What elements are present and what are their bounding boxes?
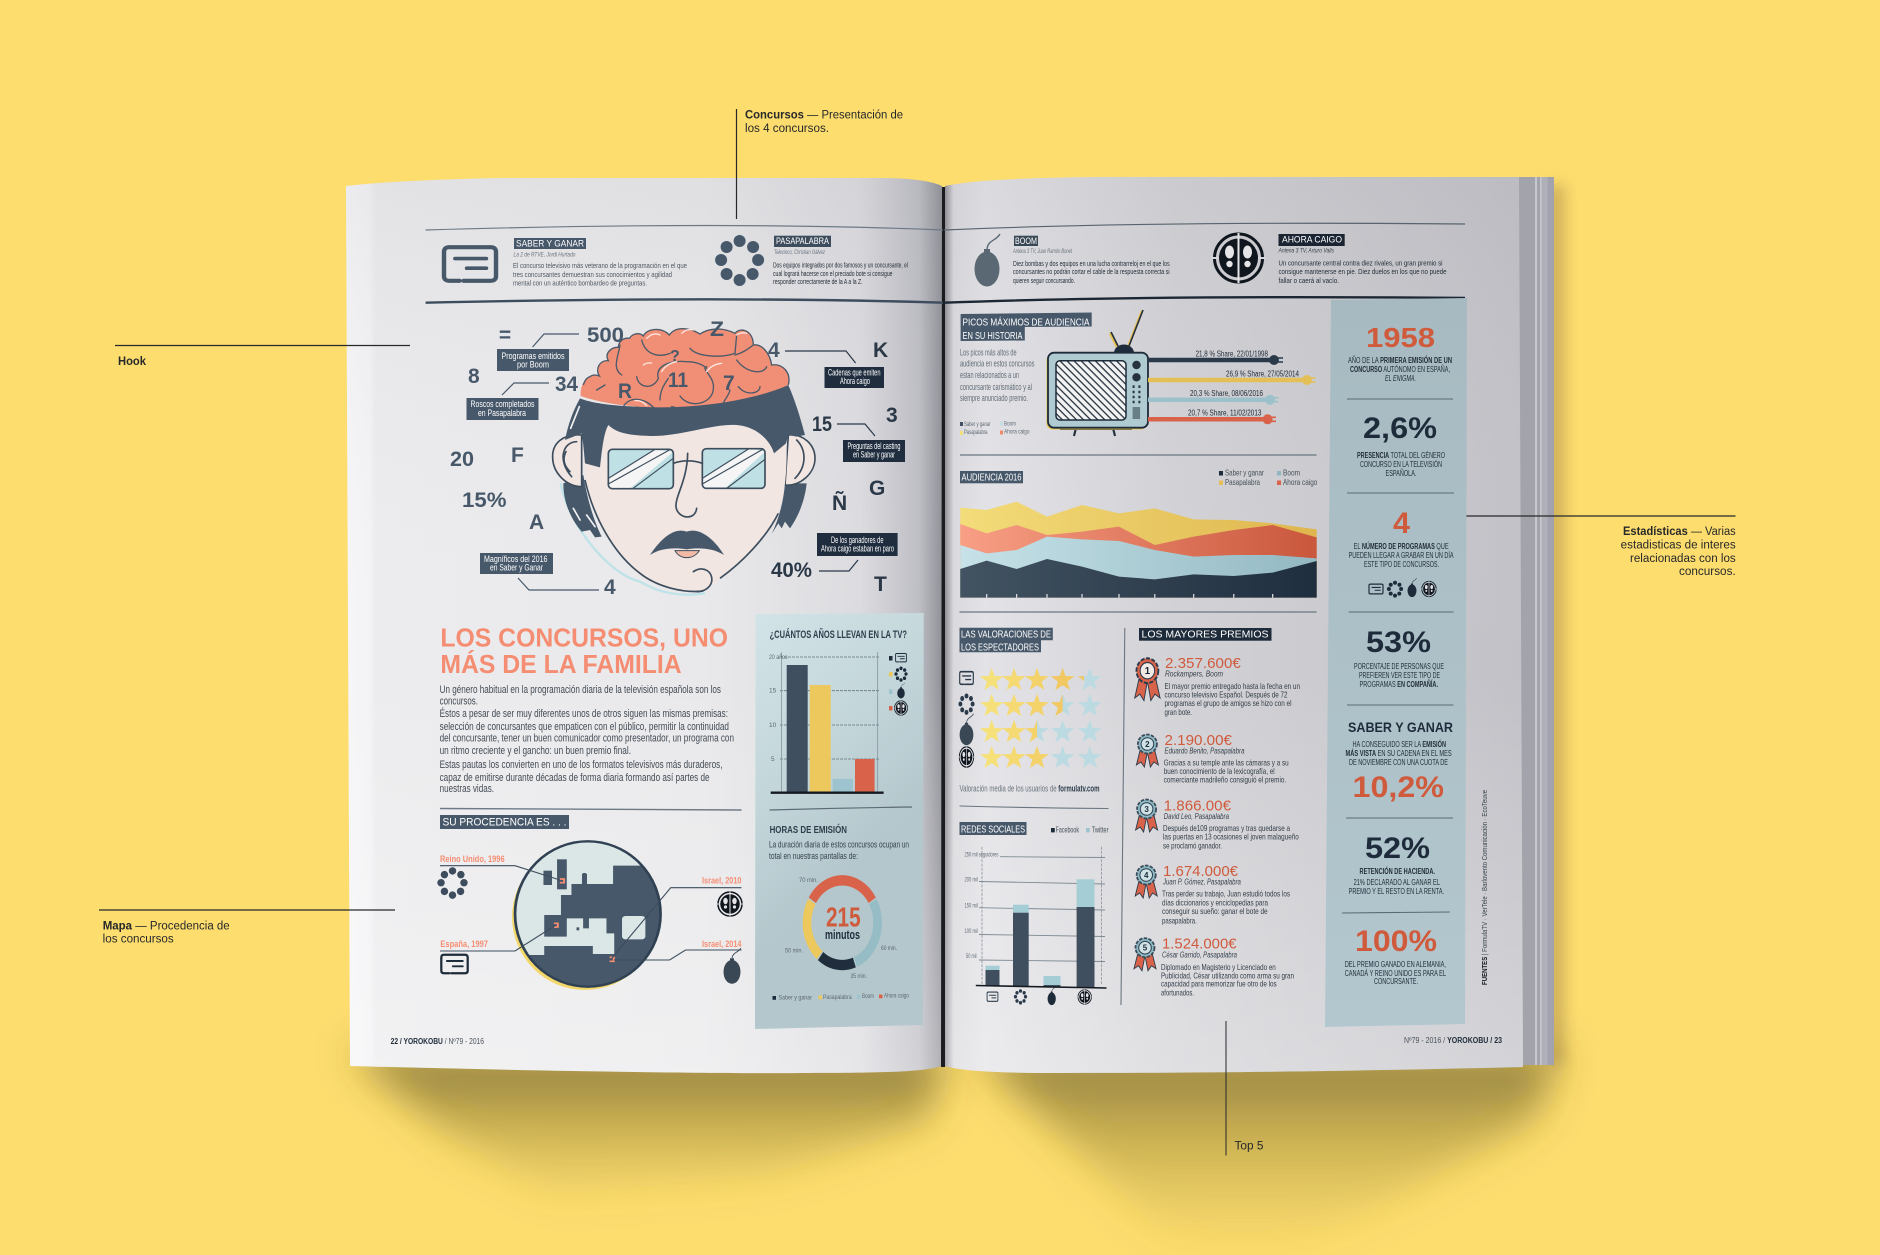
- stat: 1958: [1348, 322, 1452, 383]
- cable: Pasapalabra peak: [1148, 370, 1316, 385]
- label: Pasapalabra: [774, 236, 831, 247]
- heading: mayores premios: LOS MAYORES PREMIOS: [1142, 629, 1268, 641]
- stat: 53%: PORCENTAJE DE PERSONAS QUE: [1354, 662, 1444, 671]
- text block: introduction: selección de concursantes que empaticen con el público, permitir la continuidad: [440, 721, 729, 733]
- prize 2: buen conocimiento de la lexicografía, el: [1164, 766, 1275, 776]
- prize 5: afortunados.: [1161, 988, 1194, 998]
- legend: audiencia: Pasapalabra: [1225, 478, 1260, 487]
- panel: Ahora caigo intro: fallar o caerá al vacío.: [1278, 276, 1339, 285]
- callout: Magnificos: [480, 553, 553, 574]
- panel: hook numbers and letters: ?: [670, 348, 680, 365]
- sources: FUENTES | FormulaTV · VerTele · Barlovento Comunicación · EcoTeuve: [1480, 790, 1489, 985]
- panel: hook numbers and letters: Z: [710, 318, 724, 341]
- illustration: television: [1046, 310, 1148, 436]
- stat: 53%: PROGRAMAS EN COMPAÑÍA.: [1360, 680, 1438, 689]
- map origin: Espana: [440, 925, 556, 973]
- bar chart: followers: 100 mil: [964, 928, 978, 935]
- panel: hook numbers and letters: 7: [723, 372, 735, 395]
- rating: Pasapalabra: [958, 694, 1102, 716]
- spine: [941, 187, 945, 1067]
- panel: Ahora caigo intro: AHORA CAIGO: [1282, 235, 1342, 245]
- bar chart: followers: 200 mil: [964, 877, 978, 884]
- text block: introduction: del concursante, tener un buen comunicador como presentador, un programa con: [440, 733, 734, 745]
- legend: audiencia: Ahora caigo: [1283, 478, 1318, 487]
- cable: Boom peak: [1148, 389, 1278, 405]
- panel: Pasapalabra intro: Dos equipos integrados por dos famosos y un concursante, el: [773, 261, 908, 270]
- stat: Saber y ganar 10,2%: HA CONSEGUIDO SER LA EMISIÓN: [1352, 740, 1446, 749]
- callout: Roscos completados: en Pasapalabra: [478, 408, 526, 418]
- map origin: Israel 2014: Israel, 2014: [702, 939, 742, 950]
- panel: hook numbers and letters: A: [529, 511, 544, 534]
- stat: 100%: DEL PREMIO GANADO EN ALEMANIA,: [1345, 960, 1446, 969]
- stat: 52%: 52%: [1365, 832, 1430, 865]
- heading: picos maximos: PICOS MÁXIMOS DE AUDIENCIA: [962, 316, 1090, 329]
- cable: Boom peak: 20,3 % Share, 08/06/2016: [1190, 389, 1263, 398]
- prize 4: [1135, 863, 1290, 925]
- map origin: Reino Unido: Reino Unido, 1996: [440, 854, 505, 865]
- panel: picos maximos: [960, 310, 1316, 436]
- rating: Saber y ganar: [960, 668, 1102, 690]
- callout: Roscos completados: [466, 398, 538, 420]
- map origin: Israel 2010: [612, 876, 744, 958]
- annotation: Estadisticas: concursos.: [1679, 566, 1736, 578]
- rating: Boom: [960, 714, 1102, 745]
- footer: left folio: 22 / YOROKOBU / Nº79 - 2016: [391, 1037, 484, 1046]
- panel: hook numbers and letters: 40%: [771, 559, 812, 582]
- bar chart: years on air: 20 años: [769, 654, 788, 661]
- donut chart: 215 minutos: 50 min.: [785, 948, 803, 955]
- prize 5: [1134, 935, 1294, 998]
- panel: Boom intro: quieren seguir concursando.: [1013, 276, 1075, 285]
- prize 5: 5: [1143, 944, 1148, 953]
- stat: 4: [1349, 507, 1454, 598]
- panel: los mayores premios: [1134, 628, 1300, 998]
- panel: hook numbers and letters: 500: [587, 324, 624, 347]
- prize 2: comerciante madrileño consiguió el premio.: [1164, 775, 1286, 785]
- callout: Programas emitidos: Programas emitidos: [502, 351, 565, 361]
- prize 4: Juan P. Gómez, Pasapalabra: [1162, 877, 1241, 886]
- heading: redes sociales: REDES SOCIALES: [961, 824, 1025, 836]
- text block: duracion: [769, 840, 909, 862]
- illustration: head with brain: [553, 329, 815, 595]
- stat: Saber y ganar 10,2%: SABER Y GANAR: [1348, 719, 1453, 735]
- stat: 52%: PREMIO Y EL RESTO EN LA RENTA.: [1349, 887, 1444, 896]
- panel: Ahora caigo intro: consigue mantenerse en pie. Diez duelos en los que no puede: [1278, 267, 1446, 276]
- panel: redes sociales: [960, 822, 1109, 1005]
- prize 4: 1.674.000€: [1163, 863, 1239, 880]
- panel: Pasapalabra intro: cual logrará hacerse con el preciado bote si consigue: [773, 269, 892, 278]
- text block: introduction: Éstos a pesar de ser muy diferentes unos de otros siguen las mismas premisas:: [440, 707, 728, 720]
- panel: hook numbers and letters: K: [873, 339, 888, 362]
- legend: audiencia: [1219, 469, 1318, 487]
- callout: Preguntas del casting: en Saber y ganar: [853, 450, 895, 460]
- prize 1: Rockampers, Boom: [1165, 670, 1223, 679]
- text block: picos: Los picos más altos de: [960, 348, 1017, 359]
- panel: left page: [346, 178, 942, 1073]
- legend: picos: [960, 420, 1030, 436]
- legend: picos: Ahora caigo: [1004, 428, 1030, 436]
- panel: Saber y ganar intro: tres concursantes demuestran sus conocimientos y agilidad: [513, 270, 672, 279]
- panel: Saber y ganar intro: La 2 de RTVE, Jordi Hurtado: [514, 252, 576, 259]
- callout: Preguntas del casting: Preguntas del casting: [848, 441, 900, 451]
- stat: 52%: 21% DECLARADO AL GANAR EL: [1354, 878, 1440, 887]
- text block: introduction: capaz de emitirse durante décadas de forma diaria formando así partes de: [440, 772, 710, 784]
- prize 1: concurso televisivo Español. Después de 72: [1164, 690, 1288, 700]
- heading: valoraciones: [960, 628, 1053, 653]
- cable: Saber y ganar peak: [1148, 350, 1283, 365]
- stat: 53%: PREFIEREN VER ESTE TIPO DE: [1359, 671, 1440, 680]
- panel: Saber y ganar intro: [444, 238, 687, 288]
- caption: valoracion media: Valoración media de los usuarios de formulatv.com: [960, 784, 1100, 794]
- icon: Boom: [974, 234, 1000, 286]
- stat: 1958: EL ENIGMA.: [1385, 374, 1416, 383]
- prize 5: capacidad para memorizar fue otro de los: [1161, 979, 1277, 989]
- legend: redes: Facebook: [1056, 825, 1080, 834]
- text block: picos: concursante carismático y al: [960, 382, 1032, 393]
- cable: Ahora caigo peak: 20,7 % Share, 11/02/2013: [1188, 409, 1261, 418]
- heading: redes sociales: [960, 822, 1026, 836]
- stat: 2,6%: [1357, 412, 1445, 478]
- donut chart: 215 minutos: [785, 877, 897, 980]
- panel: Saber y ganar intro: SABER Y GANAR: [516, 239, 584, 249]
- legend: audiencia: Boom: [1283, 469, 1300, 478]
- prize 5: Diplomado en Magisterio y Licenciado en: [1161, 962, 1276, 972]
- label: Ahora caigo: [1278, 234, 1345, 246]
- prize 4: Tras perder su trabajo, Juan estudió todos los: [1162, 889, 1290, 899]
- panel: hook numbers and letters: 4: [604, 576, 616, 599]
- panel: Pasapalabra intro: [715, 235, 908, 286]
- heading: audiencia 2016: AUDIENCIA 2016: [962, 472, 1022, 484]
- stat: 1958: AÑO DE LA PRIMERA EMISIÓN DE UN: [1348, 356, 1452, 365]
- panel: hook numbers and letters: 15: [812, 413, 832, 436]
- stat: 4: 4: [1393, 507, 1410, 540]
- icon: Saber y ganar: [444, 247, 496, 281]
- panel: hook numbers and letters: 15%: [462, 489, 507, 512]
- panel: hook numbers and letters: Ñ: [832, 492, 847, 515]
- donut chart: 215 minutos: minutos: [825, 927, 860, 942]
- text block: picos: siempre anunciado premio.: [960, 393, 1028, 404]
- stat: Saber y ganar 10,2%: [1346, 719, 1453, 804]
- prize 2: Gracias a su temple ante las cámaras y a su: [1164, 758, 1289, 768]
- stat: 4: EL NÚMERO DE PROGRAMAS QUE: [1354, 542, 1449, 551]
- panel: hook numbers and letters: 34: [555, 373, 578, 396]
- bar chart: followers: [964, 847, 1106, 1005]
- callout: Magnificos: Magníficos del 2016: [484, 554, 548, 564]
- prize 3: Después de109 programas y tras quedarse a: [1163, 823, 1290, 833]
- text block: introduction: concursos.: [440, 695, 478, 707]
- icon: Ahora caigo: [1212, 233, 1266, 283]
- annotation: Concursos: los 4 concursos.: [745, 123, 829, 135]
- stat: 2,6%: ESPAÑOLA.: [1386, 469, 1416, 478]
- prize 4: días diccionarios y enciclopedias para: [1162, 898, 1268, 908]
- stat: Saber y ganar 10,2%: MÁS VISTA EN SU CADENA EN EL MES: [1346, 749, 1452, 758]
- prize 3: [1136, 798, 1299, 850]
- area chart: audiencia: [960, 502, 1317, 598]
- stat: 4: ESTE TIPO DE CONCURSOS.: [1364, 560, 1439, 569]
- donut legend: [772, 992, 909, 1002]
- prize 2: Eduardo Benito, Pasapalabra: [1164, 746, 1245, 755]
- text block: picos: estan relacionados a un: [960, 370, 1019, 381]
- chart legend icons: [889, 654, 908, 716]
- prize 1: programas el grupo de amigos se hizo con el: [1164, 698, 1292, 708]
- callout: Cadenas: Ahora caigo: [840, 376, 870, 386]
- annotation: Estadisticas: Estadísticas — Varias: [1623, 526, 1736, 538]
- prize 5: Publicidad, César utilizando como arma su gran: [1161, 970, 1294, 980]
- cable: Ahora caigo peak: [1148, 409, 1276, 424]
- book shadow: [350, 185, 1565, 1255]
- map origin: Reino Unido: [437, 854, 560, 899]
- stat: 2,6%: CONCURSO EN LA TELEVISIÓN: [1360, 460, 1442, 469]
- panel: Ahora caigo intro: Antena 3 TV, Arturo Valls: [1278, 248, 1335, 255]
- panel: Boom intro: Diez bombas y dos equipos en una lucha contrarreloj en el que los: [1013, 259, 1170, 268]
- panel: Boom intro: BOOM: [1015, 236, 1037, 246]
- callout: Programas emitidos: [497, 349, 569, 371]
- text block: picos: audiencia en estos concursos: [960, 359, 1035, 370]
- prize 1: gran bote.: [1164, 707, 1192, 717]
- annotation: Concursos: [736, 109, 903, 219]
- panel: hook numbers and letters: [450, 318, 898, 599]
- heading: picos maximos: EN SU HISTORIA: [962, 330, 1022, 342]
- stat: 2,6%: 2,6%: [1363, 412, 1437, 445]
- panel: right page: [945, 177, 1523, 1073]
- annotation: Top 5: Top 5: [1234, 1140, 1264, 1152]
- callout: Programas emitidos: por Boom: [517, 360, 549, 370]
- prize 3: 1.866.00€: [1164, 798, 1232, 815]
- text block: introduction: Estas pautas los convierten en uno de los formatos televisivos más duraderos,: [440, 759, 722, 771]
- legend: picos: Boom: [1004, 420, 1016, 428]
- panel: Saber y ganar intro: mental con un auténtico bombardeo de preguntas.: [513, 279, 647, 288]
- heading: valoraciones: LOS ESPECTADORES: [961, 641, 1039, 653]
- stat: 1958: 1958: [1366, 322, 1435, 353]
- stat: 1958: CONCURSO AUTÓNOMO EN ESPAÑA,: [1350, 365, 1450, 374]
- cable: Pasapalabra peak: 26,9 % Share, 27/05/2014: [1226, 370, 1300, 379]
- annotation: Mapa: los concursos: [103, 934, 174, 946]
- heading: cuantos años: ¿CUÁNTOS AÑOS LLEVAN EN LA TV?: [770, 628, 907, 641]
- panel: hook numbers and letters: F: [511, 444, 524, 467]
- prize 2: [1136, 732, 1289, 785]
- stat: 53%: 53%: [1366, 626, 1431, 659]
- prize 4: 4: [1144, 871, 1149, 880]
- icon: Pasapalabra: [715, 235, 764, 286]
- donut chart: 215 minutos: 215: [826, 902, 861, 933]
- callout: De los ganadores: De los ganadores de: [831, 535, 884, 545]
- annotation: Mapa: [99, 910, 395, 946]
- heading: picos maximos: [961, 312, 1092, 342]
- map: [511, 841, 671, 997]
- donut legend: Ahora caigo: [884, 992, 909, 1000]
- annotation: Mapa: Mapa — Procedencia de: [103, 920, 230, 932]
- donut chart: 215 minutos: 35 min.: [850, 973, 867, 980]
- panel: hook numbers and letters: 8: [468, 365, 480, 388]
- bar chart: years on air: [769, 652, 884, 793]
- bar chart: years on air: 15: [769, 688, 777, 694]
- panel: valoraciones: [958, 628, 1102, 794]
- text block: introduction: Un género habitual en la programación diaria de la televisión española son los: [440, 684, 721, 696]
- annotation: Estadisticas: relacionadas con los: [1630, 553, 1736, 565]
- prize 1: 2.357.600€: [1165, 655, 1241, 672]
- stat: Saber y ganar 10,2%: DE NOVIEMBRE CON UNA CUOTA DE: [1349, 758, 1448, 767]
- annotation: Top 5: [1226, 1021, 1264, 1156]
- map origin: Espana: España, 1997: [440, 939, 488, 950]
- heading: audiencia 2016: [960, 471, 1023, 484]
- prize 5: César Garrido, Pasapalabra: [1162, 950, 1237, 959]
- stat: 100%: CANADÁ Y REINO UNIDO ES PARA EL: [1345, 969, 1446, 978]
- rating: Ahora caigo: [958, 746, 1102, 768]
- panel: Ahora caigo intro: [1212, 233, 1446, 285]
- prize 3: 3: [1144, 805, 1149, 814]
- bar chart: years on air: 10: [769, 722, 777, 729]
- donut legend: Saber y ganar: [778, 994, 813, 1002]
- title: LOS CONCURSOS, UNO: [440, 623, 728, 653]
- annotation: Estadisticas: [1463, 516, 1736, 578]
- prize 2: 2: [1145, 740, 1150, 749]
- stat: Saber y ganar 10,2%: 10,2%: [1352, 771, 1444, 804]
- donut chart: 215 minutos: 60 min.: [881, 945, 897, 952]
- bar chart: followers: 50 mil: [966, 953, 977, 960]
- text block: introduction: nuestras vidas.: [440, 783, 494, 795]
- annotation: Concursos: Concursos — Presentación de: [745, 110, 903, 122]
- panel: hook numbers and letters: R: [618, 380, 632, 403]
- annotation: Hook: Hook: [118, 356, 147, 368]
- callout: Preguntas del casting: [843, 440, 905, 462]
- text block: picos: [960, 348, 1035, 404]
- bar chart: followers: 150 mil: [964, 903, 978, 910]
- legend: redes: [1051, 825, 1109, 834]
- panel: side panel left page: [755, 613, 924, 1029]
- panel: hook numbers and letters: 20: [450, 448, 474, 471]
- prize 1: [1135, 655, 1300, 717]
- stat: 100%: CONCURSANTE.: [1374, 977, 1418, 986]
- prize 4: pasapalabra.: [1162, 915, 1197, 925]
- panel: hook numbers and letters: G: [869, 477, 885, 500]
- text block: introduction: un ritmo creciente y el gancho: un buen premio final.: [440, 745, 631, 757]
- prize 3: las puertas en 13 ocasiones el joven malagueño: [1163, 831, 1299, 841]
- legend: redes: Twitter: [1092, 825, 1109, 834]
- panel: audiencia 2016: [960, 469, 1318, 598]
- header rules: [426, 223, 1465, 303]
- label: Boom: [1014, 236, 1038, 246]
- panel: Saber y ganar intro: El concurso televisivo más veterano de la programación en el que: [513, 261, 687, 270]
- stat: 2,6%: PRESENCIA TOTAL DEL GÉNERO: [1357, 451, 1445, 460]
- stat: 52%: RETENCIÓN DE HACIENDA.: [1360, 867, 1435, 876]
- map origin: Israel 2010: Israel, 2010: [702, 876, 742, 887]
- callout: Magnificos: en Saber y Ganar: [490, 562, 543, 572]
- callout: Cadenas: Cadenas que emiten: [828, 368, 880, 378]
- stat: 100%: 100%: [1355, 925, 1437, 958]
- text block: duracion: La duración diaria de estos concursos ocupan un: [769, 840, 909, 851]
- footer: right folio: Nº79 - 2016 / YOROKOBU / 23: [1404, 1036, 1502, 1045]
- prize 2: 2.190.00€: [1164, 732, 1233, 749]
- panel: Ahora caigo intro: Un concursante central contra diez rivales, un gran premio si: [1278, 259, 1443, 268]
- donut chart: 215 minutos: 70 min.: [799, 877, 818, 884]
- legend: picos: Pasapalabra: [964, 429, 988, 436]
- callout connectors: [502, 334, 875, 590]
- stat: 4: PUEDEN LLEGAR A GRABAR EN UN DÍA: [1349, 551, 1454, 560]
- text block: introduction: [440, 684, 734, 795]
- callout: De los ganadores: Ahora caigo estaban en paro: [821, 544, 894, 554]
- panel: hook numbers and letters: 11: [668, 369, 688, 392]
- cable: Saber y ganar peak: 21,8 % Share, 22/01/1998: [1196, 350, 1268, 359]
- label: Saber y ganar: [514, 238, 586, 249]
- prize 5: 1.524.000€: [1162, 935, 1237, 952]
- prize 1: El mayor premio entregado hasta la fecha en un: [1164, 681, 1300, 691]
- prize 1: 1: [1145, 666, 1151, 677]
- donut legend: Pasapalabra: [823, 994, 852, 1001]
- heading: horas de emision: HORAS DE EMISIÓN: [770, 823, 847, 836]
- panel: Boom intro: Antena 3 TV, Juan Ramón Bonet: [1012, 248, 1073, 255]
- panel: statistics column: [1325, 298, 1467, 1027]
- legend: picos: Saber y ganar: [964, 421, 991, 428]
- callout: De los ganadores: [817, 533, 898, 556]
- panel: Pasapalabra intro: Telecinco, Christian Gálvez: [774, 249, 825, 256]
- donut legend: Boom: [862, 993, 874, 1000]
- title: MÁS DE LA FAMILIA: [440, 649, 682, 679]
- heading: Su procedencia: SU PROCEDENCIA ES . . .: [442, 817, 566, 829]
- panel: hook numbers and letters: T: [874, 573, 887, 596]
- panel: hook numbers and letters: 4: [768, 339, 780, 362]
- text block: duracion: total en nuestras pantallas de:: [769, 851, 858, 862]
- legend: audiencia: Saber y ganar: [1225, 469, 1264, 478]
- panel: Pasapalabra intro: PASAPALABRA: [776, 236, 829, 246]
- bar chart: followers: 250 mil seguidores: [964, 852, 999, 859]
- prize 4: conseguir su sueño: ganar el bote de: [1162, 906, 1268, 916]
- panel: Pasapalabra intro: responder correctamente de la A a la Z.: [773, 277, 863, 286]
- bar chart: years on air: 5: [771, 756, 775, 763]
- stat: 100%: [1345, 925, 1446, 986]
- stat: 52%: [1349, 832, 1444, 896]
- heading: valoraciones: LAS VALORACIONES DE: [961, 628, 1051, 640]
- panel: Boom intro: [974, 234, 1170, 286]
- panel: hook numbers and letters: =: [499, 324, 511, 347]
- stat: 53%: [1354, 626, 1444, 689]
- callout: Roscos completados: Roscos completados: [470, 399, 535, 409]
- map origin: Israel 2014: [614, 939, 742, 984]
- title: [440, 623, 728, 679]
- panel: Boom intro: concursantes no podrán cortar el cable de la respuesta correcta si: [1013, 267, 1170, 276]
- page stack edge: [1515, 177, 1554, 1065]
- panel: hook numbers and letters: 3: [886, 404, 898, 427]
- callout: Cadenas: [824, 367, 884, 388]
- prize 3: David Leo, Pasapalabra: [1164, 812, 1229, 821]
- prize 3: se proclamó ganador.: [1163, 840, 1222, 850]
- annotation: Estadisticas: estadisticas de interes: [1621, 540, 1736, 552]
